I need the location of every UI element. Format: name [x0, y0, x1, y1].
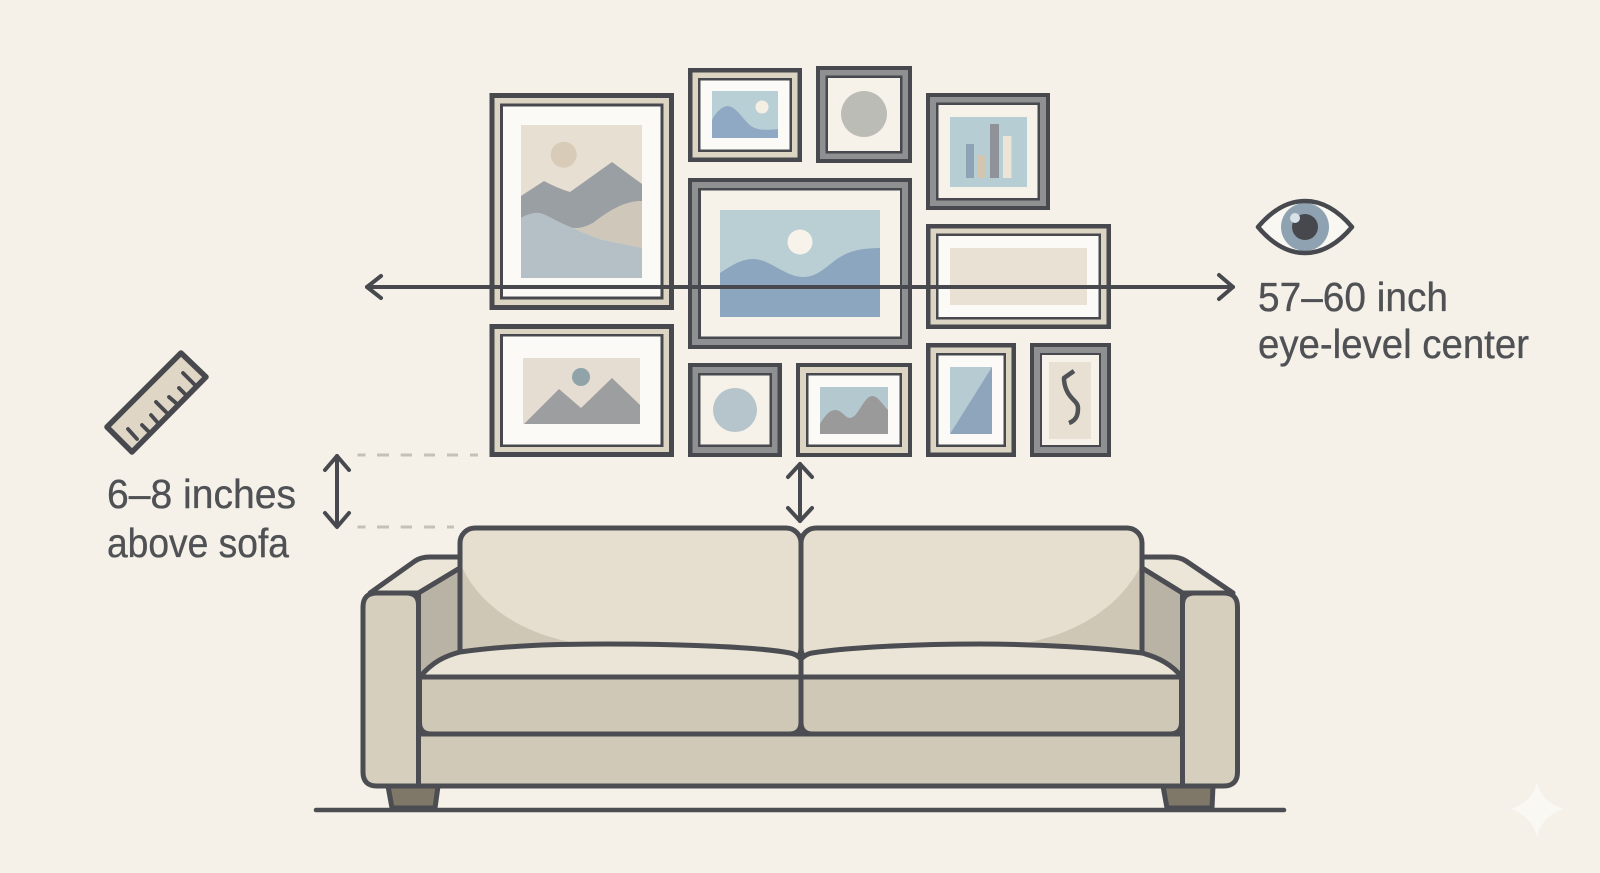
back cushion left [460, 528, 801, 663]
label: eye-level height: 57–60 inch [1258, 274, 1448, 320]
front seat cushions [420, 677, 1182, 734]
frame: small grey hills [796, 363, 912, 457]
frame: small blue hill [688, 68, 802, 162]
seat top cushions [420, 644, 1182, 677]
label: eye-level height: eye-level center [1258, 321, 1529, 367]
frame: grey circle [816, 66, 912, 163]
label: height above sofa [107, 471, 296, 566]
frame: squiggle abstract [1030, 343, 1111, 457]
sofa legs [388, 786, 1213, 808]
sofa base [418, 734, 1182, 786]
right arm front [1182, 593, 1238, 786]
icon: sparkle watermark [1510, 782, 1564, 838]
floor line [316, 808, 1284, 812]
left arm top and inner panel [370, 557, 460, 680]
arrow: gap between art and sofa [788, 464, 812, 521]
label: height above sofa: above sofa [107, 520, 289, 566]
sofa [363, 528, 1238, 808]
frame: small blue circle [688, 363, 782, 457]
right arm top and inner panel [1142, 557, 1233, 680]
back cushion right [801, 528, 1142, 663]
frame: diagonal abstract [926, 343, 1016, 457]
icon: eye [1258, 201, 1352, 253]
gallery wall of framed art [490, 66, 1111, 457]
label: eye-level height [1258, 274, 1529, 367]
dashed clearance guides [358, 455, 478, 527]
frame: twin peaks landscape [490, 324, 674, 457]
frame: large central landscape [688, 178, 912, 349]
label: height above sofa: 6–8 inches [107, 471, 296, 517]
eye-level centre line with arrowheads [367, 275, 1233, 299]
left arm front [363, 593, 418, 786]
arrow: 6–8 inch clearance [325, 456, 349, 527]
frame: wide beige panel [926, 224, 1111, 329]
frame: tall mountain landscape [490, 93, 674, 310]
icon: ruler [107, 353, 206, 452]
frame: bar composition [926, 93, 1050, 210]
